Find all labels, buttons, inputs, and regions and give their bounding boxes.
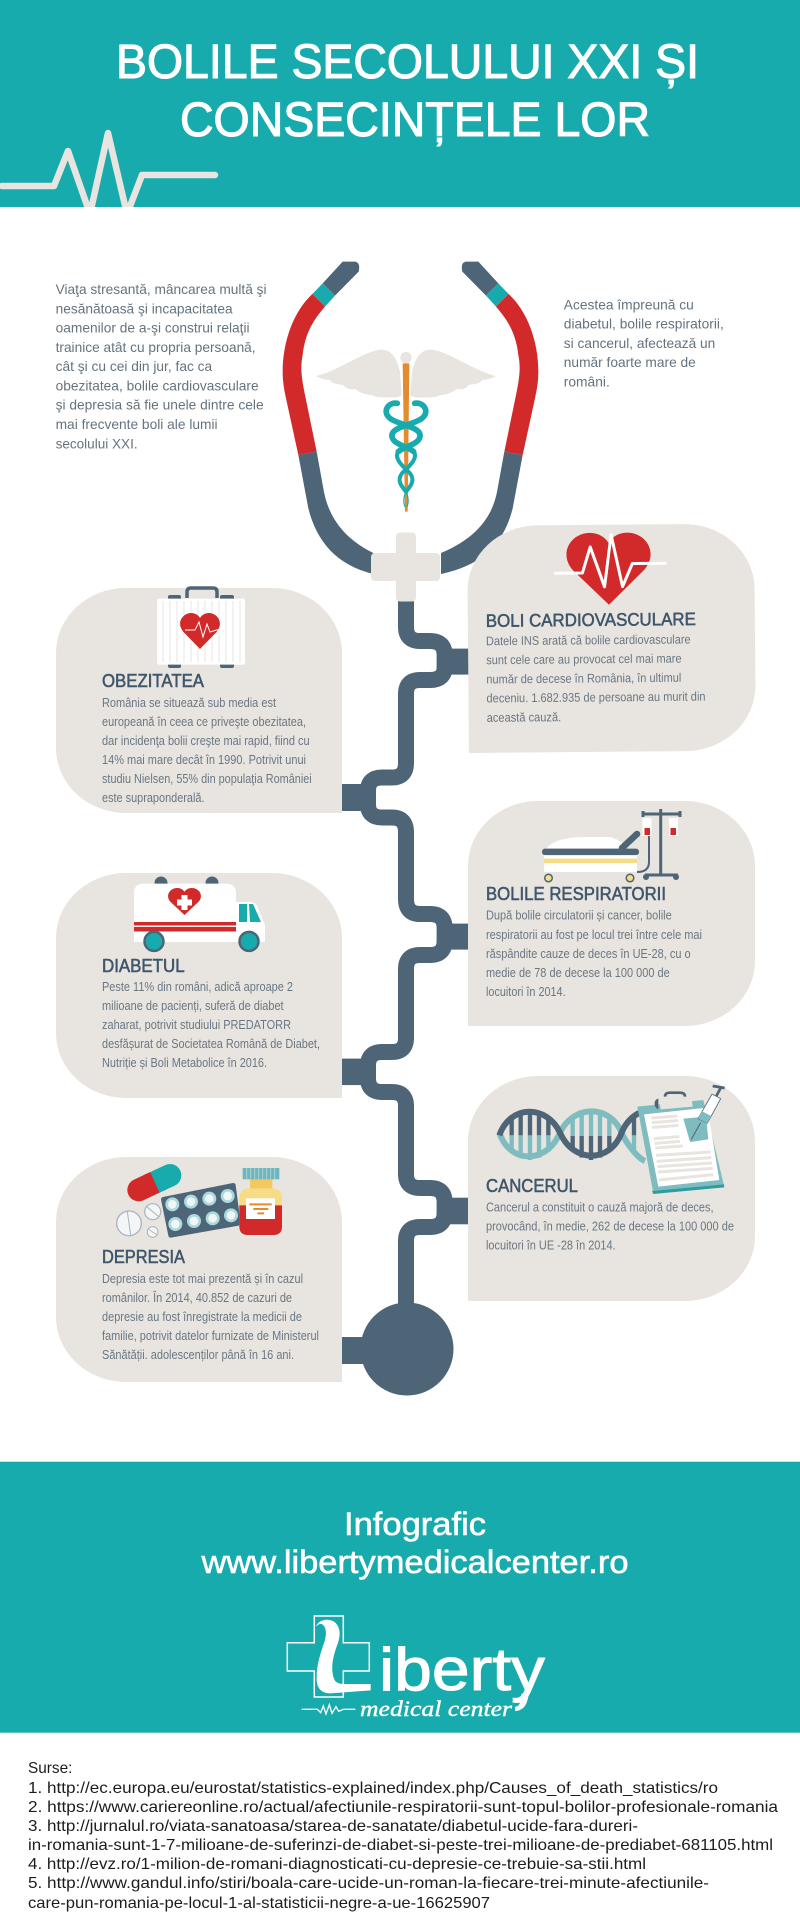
snakes <box>386 403 426 507</box>
heading: BOLILE RESPIRATORII <box>486 884 666 904</box>
logo: liberty medical center: iberty <box>379 1636 545 1703</box>
intro text left: secolului XXI. <box>56 435 138 451</box>
website: www.libertymedicalcenter.ro <box>200 1544 628 1580</box>
heading: DEPRESIA <box>102 1247 185 1267</box>
body text: După bolile circulatorii și cancer, bolile <box>486 909 672 923</box>
title: CONSECINȚELE LOR <box>180 94 650 147</box>
staff <box>403 363 409 512</box>
intro text left <box>56 281 267 451</box>
intro text right <box>564 296 724 390</box>
intro text left: obezitatea, bolile cardiovasculare <box>56 377 259 393</box>
heading: BOLI CARDIOVASCULARE <box>486 609 696 631</box>
body text: Sănătății. adolescenților până în 16 ani. <box>102 1348 294 1362</box>
body text: este supraponderală. <box>102 791 204 805</box>
icon: stethoscope <box>283 262 538 574</box>
intro text right: număr foarte mare de <box>564 354 696 370</box>
body text: europeană în ceea ce priveşte obezitatea, <box>102 715 306 729</box>
body text <box>486 1201 734 1253</box>
body text: respiratorii au fost pe locul trei între cele mai <box>486 928 702 942</box>
body text: desfășurat de Societatea Română de Diabet, <box>102 1037 320 1051</box>
body text: depresie au fost înregistrate la medicii de <box>102 1310 302 1324</box>
body text: Peste 11% din români, adică aproape 2 <box>102 980 293 994</box>
body text: Cancerul a constituit o cauză majoră de deces, <box>486 1201 714 1215</box>
body text <box>102 980 320 1070</box>
heading: DIABETUL <box>102 956 185 976</box>
body text: provocând, în medie, 262 de decese la 100 000 de <box>486 1220 734 1234</box>
icon: dna helix <box>499 1111 645 1161</box>
body text: locuitori în UE -28 în 2014. <box>486 1239 616 1253</box>
panel: cancerul <box>468 1076 755 1301</box>
icon: stethoscope cross <box>371 532 440 602</box>
header band <box>0 0 800 214</box>
intro text left: şi depresia să fie unele dintre cele <box>56 397 264 413</box>
body text: 14% mai mare decât în 1990. Potrivit unui <box>102 753 306 767</box>
body text: număr de decese în România, în ultimul <box>486 671 681 686</box>
panel: diabetul <box>56 873 342 1098</box>
pipe timeline <box>340 598 470 1396</box>
logo: liberty medical center <box>287 1616 545 1721</box>
body text: românilor. În 2014, 40.852 de cazuri de <box>102 1290 292 1305</box>
body text: răspândite cauze de deces în UE-28, cu o <box>486 947 691 961</box>
sources: 3. http://jurnalul.ro/viata-sanatoasa/starea-de-sanatate/diabetul-ucide-fara-dureri- <box>28 1818 638 1835</box>
body text: Datele INS arată că bolile cardiovasculare <box>486 632 691 648</box>
intro text right: diabetul, bolile respiratorii, <box>564 316 724 332</box>
panel: obezitatea <box>56 588 342 813</box>
panel: depresia <box>56 1157 342 1382</box>
icon: clipboard and syringe <box>637 1086 725 1194</box>
intro text left: trainice atât cu propria persoană, <box>56 339 256 355</box>
body text: dar incidenţa bolii creşte mai rapid, fiind cu <box>102 734 310 748</box>
body text: sunt cele care au provocat cel mai mare <box>486 652 682 667</box>
title: BOLILE SECOLULUI XXI ȘI <box>116 36 699 89</box>
panel: bolile respiratorii <box>468 801 755 1026</box>
sources: care-pun-romania-pe-locul-1-al-statisticii-negre-a-ue-16625907 <box>28 1895 490 1912</box>
footer band <box>0 1462 800 1733</box>
body text: această cauză. <box>487 710 561 725</box>
body text <box>102 1272 319 1362</box>
heading: OBEZITATEA <box>102 671 204 691</box>
body text: milioane de pacienți, suferă de diabet <box>102 999 284 1013</box>
logo: liberty medical center: medical center <box>360 1696 513 1721</box>
intro text left: mai frecvente boli ale lumii <box>56 416 218 432</box>
sources: in-romania-sunt-1-7-milioane-de-suferinzi-de-diabet-si-peste-trei-milioane-de-prediabet-681105.html <box>28 1837 773 1854</box>
body text: România se situează sub media est <box>102 696 276 710</box>
sources: Surse: <box>28 1760 72 1777</box>
body text: Nutriție și Boli Metabolice în 2016. <box>102 1056 267 1070</box>
intro text right: români. <box>564 374 610 390</box>
sources: 1. http://ec.europa.eu/eurostat/statistics-explained/index.php/Causes_of_death_statistics/ro <box>28 1780 718 1797</box>
body text: studiu Nielsen, 55% din populaţia României <box>102 772 312 786</box>
intro text left: oamenilor de a-şi construi relaţii <box>56 320 250 336</box>
sources <box>28 1760 778 1912</box>
icon: hospital bed and iv stand <box>542 809 680 882</box>
body text: medie de 78 de decese la 100 000 de <box>486 966 670 980</box>
body text: zaharat, potrivit studiului PREDATORR <box>102 1018 291 1032</box>
heading: CANCERUL <box>486 1176 578 1196</box>
body text: familie, potrivit datelor furnizate de Ministerul <box>102 1329 319 1343</box>
body text <box>486 632 706 725</box>
icon: heart with ecg <box>555 532 666 605</box>
body text: Depresia este tot mai prezentă și în cazul <box>102 1272 303 1286</box>
sources: 5. http://www.gandul.info/stiri/boala-care-ucide-un-roman-la-fiecare-trei-minute-afectiunile- <box>28 1875 709 1892</box>
body text <box>486 909 702 999</box>
body text <box>102 696 312 805</box>
infographic label: Infografic <box>344 1506 486 1542</box>
intro text left: cât şi cu cei din jur, fac ca <box>56 358 212 374</box>
body text: locuitori în 2014. <box>486 985 566 999</box>
intro text right: si cancerul, afectează un <box>564 335 715 351</box>
icon: ecg line <box>2 133 215 214</box>
body text: deceniu. 1.682.935 de persoane au murit din <box>486 690 706 705</box>
wings <box>316 350 496 398</box>
icon: ambulance <box>134 876 265 951</box>
title <box>116 36 699 147</box>
icon: caduceus <box>316 350 496 512</box>
sources: 2. https://www.cariereonline.ro/actual/afectiunile-respiratorii-sunt-topul-bolilor-profesionale-romania <box>28 1799 778 1816</box>
intro text left: nesănătoasă şi incapacitatea <box>56 300 233 316</box>
icon: pills and bottle <box>117 1168 282 1237</box>
icon: medical suitcase <box>157 588 245 668</box>
intro text right: Acestea împreună cu <box>564 296 694 312</box>
panel: boli cardiovasculare <box>467 523 756 753</box>
sources: 4. http://evz.ro/1-milion-de-romani-diagnosticati-cu-depresie-ce-trebuie-sa-stii.html <box>28 1856 646 1873</box>
intro text left: Viaţa stresantă, mâncarea multă şi <box>56 281 267 297</box>
